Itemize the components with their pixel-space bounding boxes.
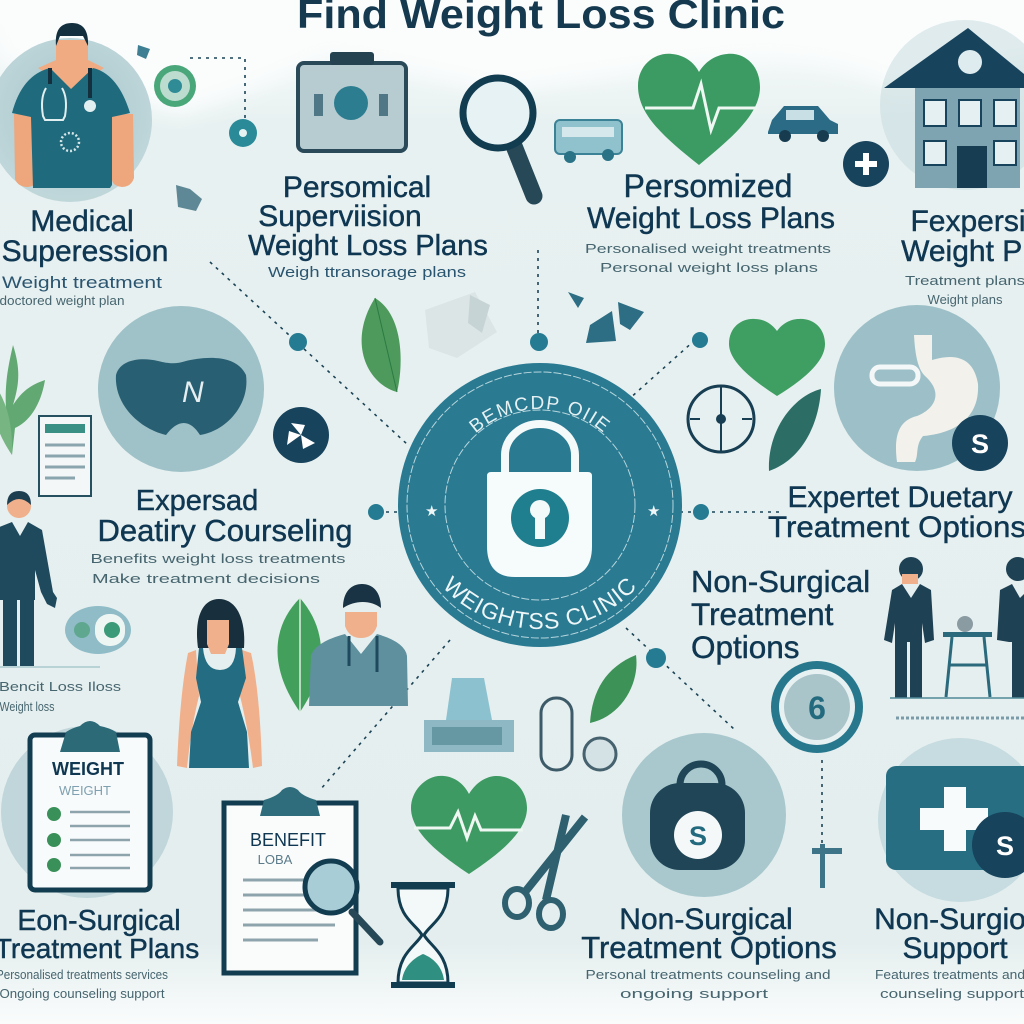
icon: green heart (638, 54, 760, 165)
icon: scissors (505, 815, 585, 928)
heading: personalized plans: Personalised weight treatments (585, 241, 832, 256)
heading: non-surgical support: Features treatments and (875, 967, 1024, 982)
icon: woman (177, 599, 262, 768)
heading: personalized plans: Persomized (624, 168, 792, 204)
icon: hourglass (391, 885, 455, 985)
heading: personalized plans (585, 168, 835, 275)
icon: kidney dark circle: N (182, 376, 204, 409)
connector lines (190, 58, 822, 850)
heading: non-surgical options (581, 903, 837, 1001)
heading: non-surgical treatment: Non-Surgical (691, 564, 870, 599)
heading: personical supervision: Persomical (283, 171, 431, 204)
heading: non-surgical options: ongoing support (620, 986, 769, 1001)
heading: non-surgical options: Treatment Options (581, 930, 837, 965)
icon: clock (771, 661, 863, 753)
icon: car (768, 106, 838, 142)
heading: eon-surgical plans: Treatment Plans (0, 933, 199, 964)
central badge (398, 363, 682, 647)
heading: expertise right: Fexpersi (910, 205, 1024, 238)
icon: doctor (0, 23, 152, 202)
icon: clipboard benefit: BENEFIT (250, 830, 326, 850)
icon: hospital (880, 20, 1024, 190)
icon: small birds (568, 292, 644, 343)
heading: expertise right: Weight plans (928, 292, 1003, 307)
icon: magnifying glass (463, 78, 534, 196)
icon: stomach circle: S (971, 429, 989, 459)
central badge: ★ (647, 503, 660, 520)
heading: expert dietary counseling (90, 485, 352, 586)
heading: medical supervision (0, 205, 168, 308)
heading: medical supervision: Superession (2, 235, 168, 268)
heading: expertise right: Treatment plans (905, 273, 1024, 288)
icon: plant (0, 345, 45, 455)
icon: large leaf (278, 598, 321, 712)
icon: lock circle: S (689, 821, 707, 851)
icon: gauge (688, 386, 754, 452)
icon: medicine box (424, 678, 514, 752)
heading: non-surgical support (874, 903, 1024, 1001)
heading: medical supervision: Weight treatment (2, 273, 162, 292)
heading: expert dietary (768, 481, 1024, 544)
heading: non-surgical options: Personal treatments counseling and (586, 967, 830, 982)
icon: heart lower (411, 776, 527, 874)
icon: document small (39, 416, 91, 496)
heading: medical supervision: Medical (30, 205, 134, 238)
heading: expertise right (901, 205, 1024, 307)
heading: non-surgical support: Support (902, 932, 1008, 965)
heading: non-surgical support: counseling support (880, 986, 1024, 1001)
heading: expert dietary counseling: Expersad (136, 485, 258, 517)
icon: first aid case (878, 738, 1024, 902)
icon: clipboard benefit: LOBA (258, 852, 293, 867)
heading: personical supervision (248, 171, 488, 281)
icon: briefcase screen (298, 52, 406, 151)
heading: eon-surgical plans (0, 905, 199, 1001)
icon: small post (812, 844, 842, 888)
icon: stomach circle (834, 305, 1008, 471)
icon: leaf (362, 298, 401, 392)
central badge: BEMCDP OIIE (468, 396, 610, 432)
heading: non-surgical treatment: Options (691, 629, 800, 665)
heading: expert dietary: Expertet Duetary (787, 481, 1013, 514)
heading: expert dietary: Treatment Options (768, 511, 1024, 544)
icon: lock circle (622, 733, 786, 897)
icon: two business people (884, 557, 1024, 718)
icon: clipboard weight: WEIGHT (52, 759, 124, 779)
text: weight loss fragment: Bencit Loss Iloss (0, 679, 122, 694)
text: weight loss fragment (0, 679, 122, 714)
icon: clipboard benefit (224, 787, 380, 973)
heading: medical supervision: doctored weight plan (0, 293, 124, 308)
central badge: WEIGHTSS CLINIC (445, 575, 634, 630)
icon: flower badge (273, 407, 329, 463)
icon: male nurse (309, 584, 408, 706)
heading: personical supervision: Weight Loss Plans (248, 230, 488, 262)
heading: non-surgical treatment (691, 564, 870, 665)
icon: papers (425, 292, 497, 358)
icon: plus badge (843, 141, 889, 187)
icon: heart right (729, 319, 825, 396)
heading: eon-surgical plans: Personalised treatments services (0, 967, 168, 982)
heading: non-surgical support: Non-Surgio (874, 903, 1024, 936)
heading: personical supervision: Superviision (258, 200, 422, 233)
heading: expert dietary counseling: Make treatment decisions (92, 571, 321, 586)
icon: clipboard weight: WEIGHT (59, 783, 111, 798)
icon: capsule outline (541, 698, 616, 770)
icon: kidney dark circle (98, 306, 264, 472)
heading: personical supervision: Weigh ttransorage plans (268, 264, 466, 281)
heading: non-surgical options: Non-Surgical (619, 903, 793, 936)
text: weight loss fragment: Weight loss (0, 699, 55, 714)
icon: medical badge cluster (137, 45, 257, 211)
heading: non-surgical treatment: Treatment (691, 596, 834, 632)
icon: leaf center (590, 655, 637, 723)
icon: pill badge (65, 606, 131, 654)
icon: clock: 6 (808, 690, 826, 726)
heading: personalized plans: Personal weight loss plans (600, 260, 819, 275)
icon: first aid case: S (996, 831, 1014, 861)
icon: dark leaf (769, 389, 821, 471)
icon: clipboard weight (1, 721, 173, 898)
heading: expert dietary counseling: Deatiry Courseling (98, 513, 352, 548)
heading: eon-surgical plans: Eon-Surgical (17, 905, 181, 937)
heading: eon-surgical plans: Ongoing counseling support (0, 986, 165, 1001)
central badge: ★ (425, 503, 438, 520)
heading: personalized plans: Weight Loss Plans (587, 202, 835, 235)
icon: bus (555, 120, 622, 163)
heading: expert dietary counseling: Benefits weight loss treatments (90, 551, 346, 566)
icon: standing person left (0, 491, 100, 667)
